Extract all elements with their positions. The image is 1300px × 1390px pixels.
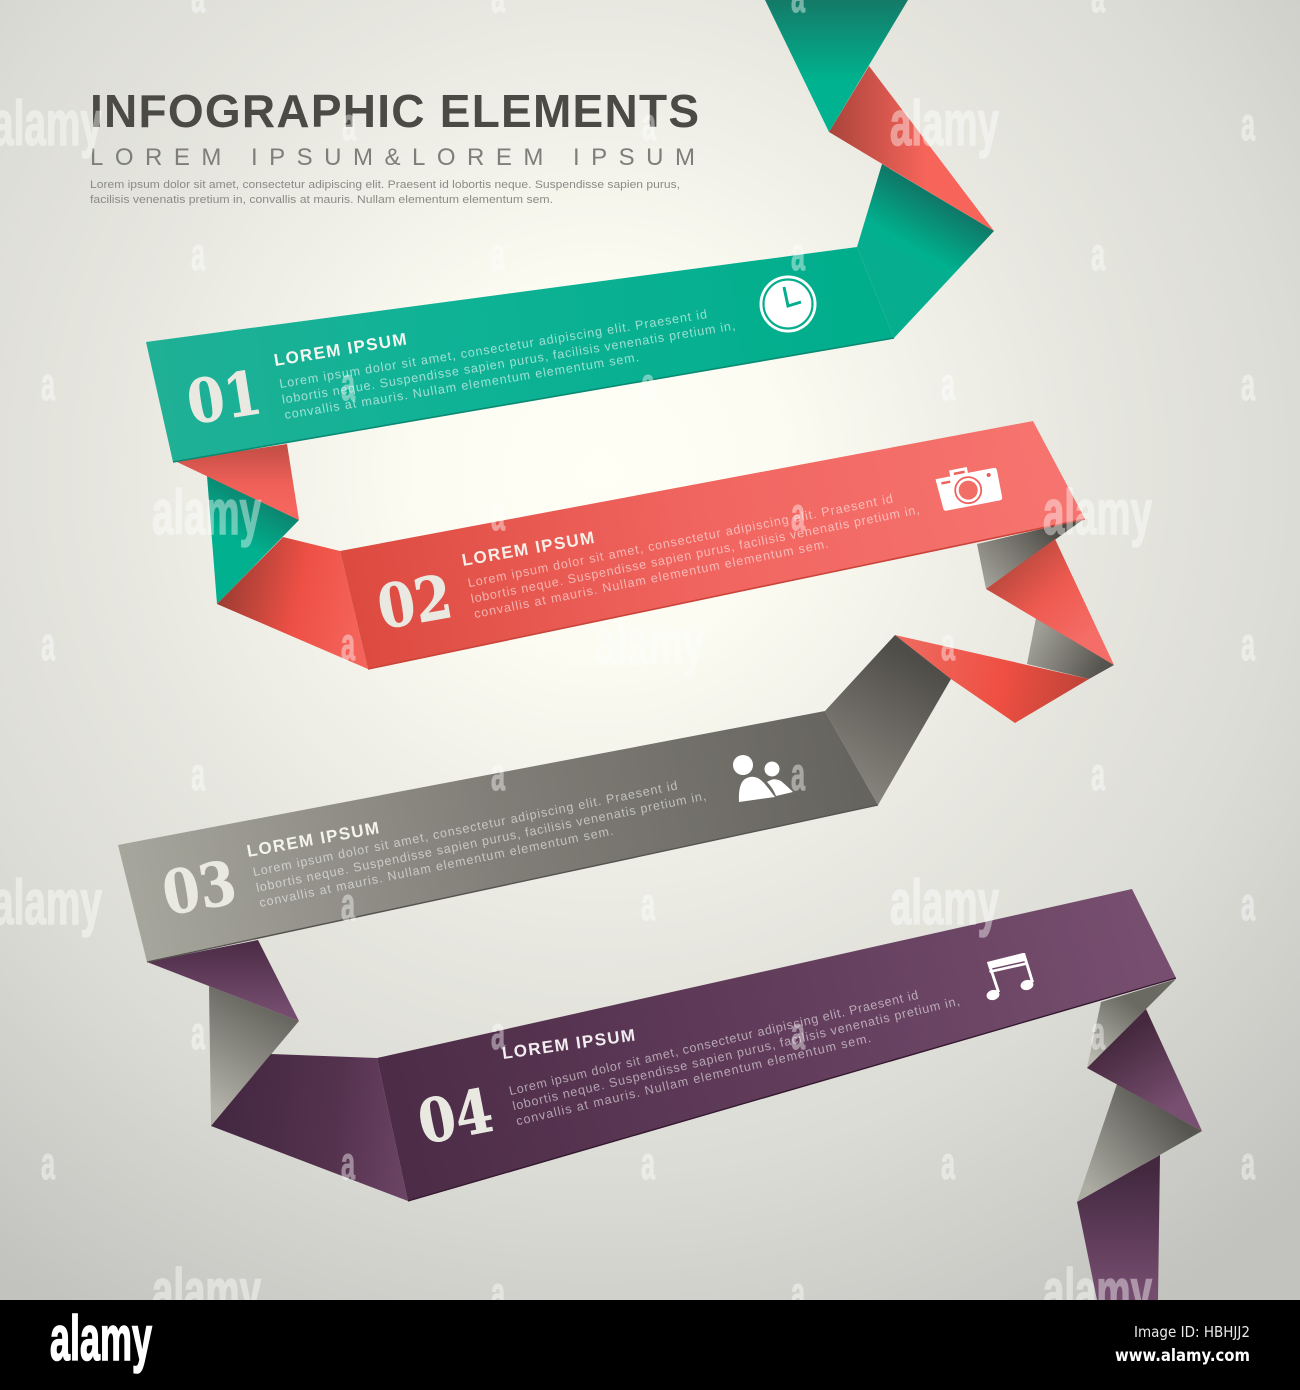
watermarks: a	[491, 748, 505, 800]
watermarks: alamy	[595, 608, 704, 678]
body 04: convallis at mauris. Nullam elementum elementum sem.	[515, 1031, 872, 1128]
watermarks: a	[941, 358, 955, 410]
watermarks: a	[791, 228, 805, 280]
watermarks: a	[941, 618, 955, 670]
watermarks: alamy	[890, 89, 999, 159]
band 04 text	[413, 979, 965, 1159]
ribbon segment 04: purple with folds	[211, 889, 1202, 1300]
watermarks: a	[341, 1137, 355, 1189]
icon: camera	[934, 461, 1003, 512]
watermarks: a	[1091, 228, 1105, 280]
watermarks: a	[1091, 748, 1105, 800]
body 01: lobortis neque. Suspendisse sapien purus, facilisis venenatis pretium in,	[281, 319, 736, 407]
title block	[90, 85, 699, 206]
image id: Image ID: HBHJJ2	[1134, 1323, 1250, 1341]
watermarks: a	[41, 358, 55, 410]
watermarks: a	[341, 618, 355, 670]
watermarks: alamy	[1043, 1257, 1152, 1327]
band 02 text	[372, 487, 924, 644]
body 01: convallis at mauris. Nullam elementum elementum sem.	[283, 350, 640, 422]
watermarks: a	[1241, 1137, 1255, 1189]
watermarks: a	[641, 878, 655, 930]
body 02: convallis at mauris. Nullam elementum elementum sem.	[473, 537, 830, 621]
watermarks: a	[491, 1007, 505, 1059]
body 02: lobortis neque. Suspendisse sapien purus, facilisis venenatis pretium in,	[470, 503, 921, 606]
website: www.alamy.com	[1115, 1346, 1250, 1366]
watermarks: a	[1241, 98, 1255, 150]
body 01: Lorem ipsum dolor sit amet, consectetur adipiscing elit. Praesent id	[278, 307, 708, 391]
number 04: 04	[413, 1076, 499, 1159]
watermarks: a	[342, 98, 356, 150]
watermarks: a	[191, 228, 205, 280]
number 01: 01	[182, 358, 266, 439]
watermarks: a	[1241, 618, 1255, 670]
watermarks: a	[791, 1007, 805, 1059]
heading 03: LOREM IPSUM	[245, 818, 381, 861]
watermarks: a	[791, 748, 805, 800]
watermarks: a	[641, 358, 655, 410]
watermarks: a	[41, 618, 55, 670]
watermarks: a	[642, 98, 656, 150]
watermarks: a	[191, 1007, 205, 1059]
watermarks: a	[791, 488, 805, 540]
watermarks: a	[1241, 878, 1255, 930]
intro text: Lorem ipsum dolor sit amet, consectetur adipiscing elit. Praesent id lobortis neque. Suspendisse sapien purus,	[90, 179, 680, 191]
body 03: lobortis neque. Suspendisse sapien purus, facilisis venenatis pretium in,	[255, 789, 707, 895]
intro text	[90, 179, 680, 206]
watermarks: a	[491, 1267, 505, 1319]
watermarks: alamy	[152, 1257, 261, 1327]
watermarks: a	[941, 1137, 955, 1189]
footer logo: alamy	[50, 1304, 152, 1374]
ribbon segment 01: teal with folds	[146, 0, 994, 604]
icon: clock	[760, 276, 816, 332]
body 02: Lorem ipsum dolor sit amet, consectetur adipiscing elit. Praesent id	[467, 492, 894, 590]
title: INFOGRAPHIC ELEMENTS	[90, 85, 699, 137]
watermarks: alamy	[152, 478, 261, 548]
icon: people	[733, 755, 793, 802]
body 04: Lorem ipsum dolor sit amet, consectetur adipiscing elit. Praesent id	[508, 988, 920, 1098]
watermarks: alamy	[1043, 478, 1152, 548]
subtitle: LOREM IPSUM&LOREM IPSUM	[90, 144, 695, 171]
ribbon segment 02: red with folds	[217, 421, 1114, 723]
intro text: facilisis venenatis pretium in, convallis at mauris. Nullam elementum elementum sem.	[90, 194, 553, 206]
heading 01: LOREM IPSUM	[273, 330, 408, 370]
watermarks: alamy	[890, 868, 999, 938]
body 04: lobortis neque. Suspendisse sapien purus, facilisis venenatis pretium in,	[511, 994, 961, 1113]
watermarks: a	[341, 878, 355, 930]
watermarks: a	[641, 1137, 655, 1189]
heading 04: LOREM IPSUM	[501, 1025, 636, 1063]
body 03: convallis at mauris. Nullam elementum elementum sem.	[258, 824, 614, 910]
heading 02: LOREM IPSUM	[460, 528, 596, 570]
band 03 text	[157, 773, 710, 930]
band 01 text	[182, 303, 739, 439]
watermarks: a	[791, 1267, 805, 1319]
watermarks: a	[41, 1137, 55, 1189]
footer bar	[0, 1300, 1300, 1390]
watermarks: a	[491, 228, 505, 280]
number 03: 03	[157, 848, 241, 930]
body 03: Lorem ipsum dolor sit amet, consectetur adipiscing elit. Praesent id	[252, 778, 679, 879]
watermarks: a	[491, 488, 505, 540]
watermarks: a	[1241, 358, 1255, 410]
watermarks: a	[191, 748, 205, 800]
icon: music notes	[985, 953, 1035, 1002]
watermarks: a	[341, 358, 355, 410]
number 02: 02	[372, 562, 457, 644]
watermarks: a	[1091, 1007, 1105, 1059]
ribbon segment 03: grey with folds	[118, 635, 951, 1126]
